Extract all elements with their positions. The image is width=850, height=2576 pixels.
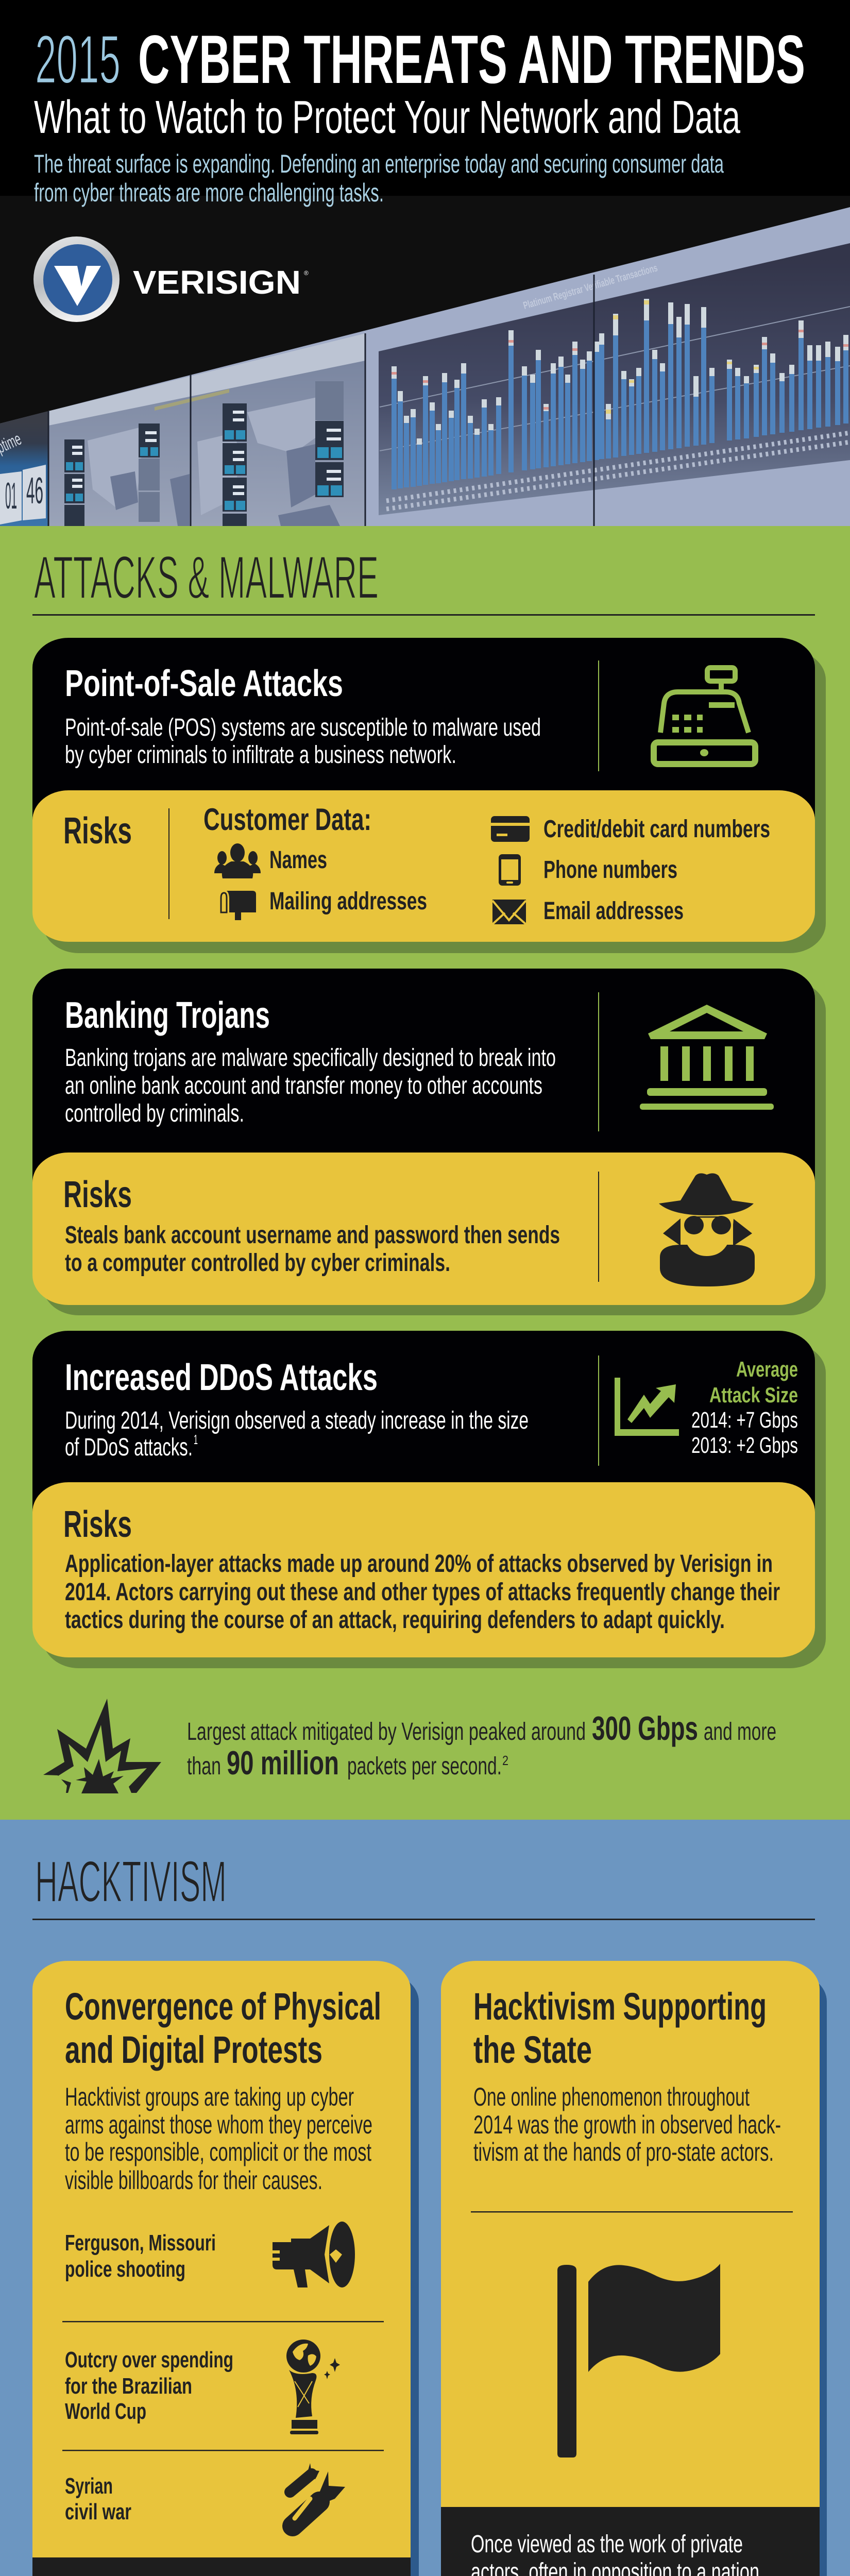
- screen clock tiles: 01: [5, 476, 17, 517]
- callout: largest attack: [187, 1709, 776, 1782]
- item: ferguson: [65, 2230, 216, 2282]
- item: syrian civil war: civil war: [65, 2499, 131, 2524]
- screen clock tiles: [0, 465, 46, 524]
- risks heading: Risks: [63, 810, 132, 852]
- risk list: Names: [269, 846, 327, 874]
- body text: [65, 1044, 556, 1127]
- average attack size: 2013: +2 Gbps: [691, 1433, 798, 1458]
- body text: [473, 2082, 781, 2166]
- section heading: HACKTIVISM: [35, 1849, 227, 1914]
- photo: monitoring wall: 46: [26, 470, 43, 512]
- icon: spy: [659, 1173, 755, 1286]
- panel: point-of-sale attacks: [32, 638, 826, 953]
- item: ferguson: Ferguson, Missouri: [65, 2230, 216, 2256]
- risks heading: Risks: [63, 1174, 132, 1215]
- icon: cash register: [654, 668, 755, 764]
- average attack size: [691, 1357, 798, 1458]
- average attack size: 2014: +7 Gbps: [691, 1408, 798, 1433]
- risk list: [269, 816, 770, 925]
- icon: mailbox: [221, 891, 256, 920]
- body text: [65, 1407, 529, 1461]
- risk list: Mailing addresses: [269, 888, 427, 915]
- logo: Verisign: VERISIGN: [133, 264, 301, 301]
- dashboard tiles: [64, 381, 344, 526]
- callout: largest attack: than: [187, 1753, 221, 1780]
- icon: flag: [557, 2264, 720, 2458]
- heading: Increased DDoS Attacks: [65, 1357, 378, 1398]
- body text: [65, 714, 541, 769]
- item: ferguson: police shooting: [65, 2257, 185, 2282]
- intro text: [34, 149, 724, 207]
- heading: Banking Trojans: [65, 995, 270, 1036]
- average attack size: Attack Size: [709, 1383, 798, 1407]
- icon: phone: [499, 854, 521, 886]
- body text: During 2014, Verisign observed a steady increase in the size: [65, 1407, 529, 1434]
- callout: largest attack: 300 Gbps: [592, 1709, 698, 1747]
- heading: Point-of-Sale Attacks: [65, 663, 343, 704]
- logo: Verisign: [33, 236, 309, 322]
- photo: monitoring wall: [0, 207, 850, 526]
- panel: hacktivism supporting the state: [441, 1961, 827, 2576]
- body text: 1: [194, 1432, 198, 1447]
- body text: an online bank account and transfer money to other accounts: [65, 1072, 542, 1099]
- risk list: Email addresses: [543, 897, 684, 925]
- body text: by cyber criminals to infiltrate a business network.: [65, 741, 456, 769]
- heading: and Digital Protests: [65, 2028, 322, 2071]
- panel: increased ddos attacks: [32, 1331, 826, 1668]
- body text: Point-of-sale (POS) systems are susceptible to malware used: [65, 714, 541, 741]
- heading: [65, 1985, 381, 2071]
- item: world cup: Outcry over spending: [65, 2347, 233, 2372]
- icon: bombs: [290, 2463, 345, 2526]
- bar chart in photo: [394, 299, 846, 489]
- heading: [473, 1985, 767, 2071]
- icon: rising chart: [615, 1378, 679, 1436]
- logo: Verisign: ®: [304, 269, 309, 277]
- screen text: chart title: Platinum Registrar Verifiable Transactions: [522, 262, 659, 312]
- icon: megaphone: [273, 2222, 355, 2287]
- heading: Convergence of Physical: [65, 1985, 381, 2028]
- item: world cup: World Cup: [65, 2399, 146, 2424]
- body text: visible billboards for their causes.: [65, 2166, 322, 2195]
- average attack size: Average: [736, 1357, 798, 1381]
- risks text: to a computer controlled by cyber criminals.: [65, 1249, 450, 1277]
- dark callout text: [471, 2531, 759, 2576]
- customer data heading: Customer Data:: [203, 802, 371, 837]
- header band: [0, 0, 850, 526]
- body text: Banking trojans are malware specifically designed to break into: [65, 1044, 556, 1072]
- body text: arms against those whom they perceive: [65, 2110, 372, 2139]
- icon: explosion: [43, 1699, 161, 1793]
- callout: largest attack: 2: [502, 1753, 508, 1768]
- icon: bank: [640, 1005, 774, 1110]
- dark callout text: Once viewed as the work of private: [471, 2531, 743, 2558]
- item: syrian civil war: [65, 2473, 131, 2524]
- callout: largest attack: packets per second.: [347, 1753, 502, 1780]
- panel: convergence of physical and digital protests: [32, 1961, 419, 2576]
- risks text: Steals bank account username and password then sends: [65, 1222, 560, 1249]
- intro text: from cyber threats are more challenging tasks.: [34, 178, 384, 207]
- body text: [65, 2082, 372, 2195]
- item: syrian civil war: Syrian: [65, 2473, 113, 2499]
- panel: banking trojans: [32, 969, 826, 1315]
- body text: of DDoS attacks.: [65, 1434, 193, 1461]
- section: hacktivism: [0, 1820, 850, 2576]
- section: attacks and malware: [0, 526, 850, 1820]
- body text: Hacktivist groups are taking up cyber: [65, 2082, 354, 2111]
- item: world cup: [65, 2347, 233, 2424]
- icon: world cup trophy: [286, 2340, 340, 2434]
- risks heading: Risks: [63, 1504, 132, 1545]
- callout: largest attack: and more: [704, 1718, 776, 1745]
- callout: largest attack: 90 million: [227, 1744, 339, 1782]
- icon: credit card: [491, 816, 530, 842]
- section heading: ATTACKS & MALWARE: [34, 544, 379, 611]
- risks text: [65, 1550, 780, 1634]
- callout: largest attack: Largest attack mitigated by Verisign peaked around: [187, 1718, 586, 1745]
- title: 2015: [35, 22, 121, 98]
- icon: envelope: [492, 900, 526, 924]
- body text: to be responsible, complicit or the most: [65, 2138, 371, 2166]
- risk list: Credit/debit card numbers: [543, 816, 770, 843]
- icon: people: [214, 843, 261, 878]
- heading: the State: [473, 2028, 592, 2071]
- risks text: [65, 1222, 560, 1277]
- item: world cup: for the Brazilian: [65, 2374, 192, 2399]
- body text: controlled by criminals.: [65, 1100, 244, 1127]
- risk list: Phone numbers: [543, 856, 677, 884]
